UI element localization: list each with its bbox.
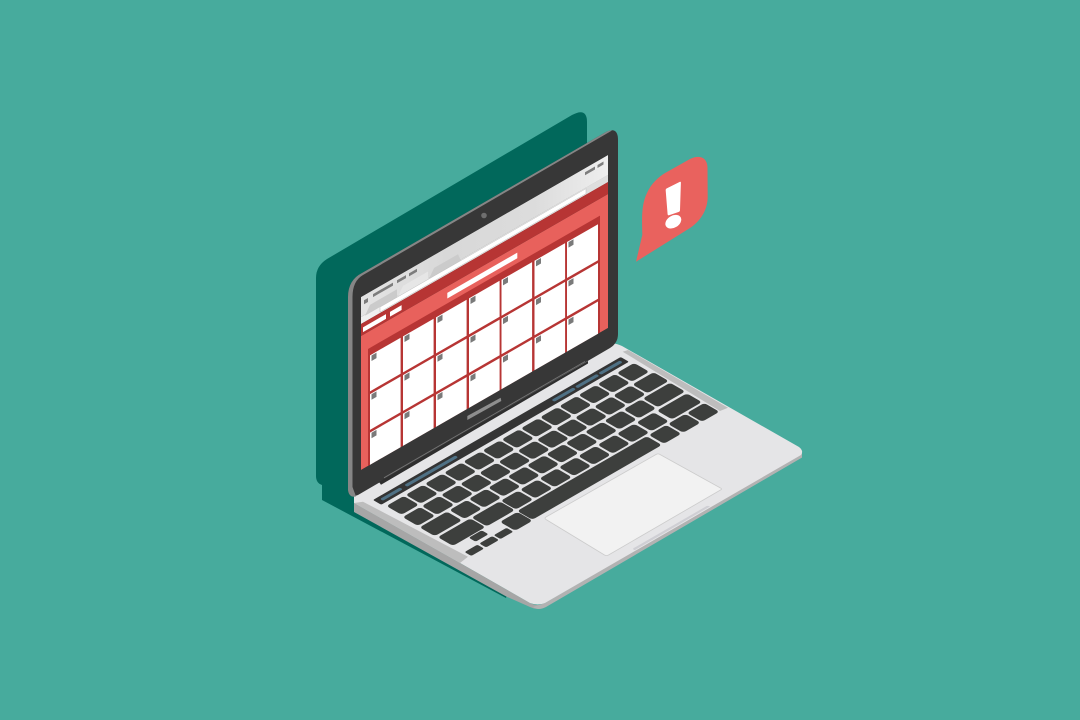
lid rim: [348, 130, 612, 497]
screen red page: [361, 194, 608, 470]
screen with calendar: [361, 155, 608, 474]
laptop lid: [348, 130, 618, 497]
calendar cell markers: [372, 239, 574, 438]
laptop base: [354, 343, 802, 609]
calendar title bar: [447, 253, 517, 298]
bubble shape: [636, 157, 708, 262]
base side edge: [354, 455, 802, 609]
browser tab 2: [398, 271, 428, 297]
right hinge strip: [623, 350, 728, 411]
calendar cells: [370, 224, 598, 469]
left hinge strip: [354, 502, 468, 563]
browser tab 1: [365, 289, 397, 316]
key row 2: [404, 373, 667, 525]
touch bar: [373, 357, 629, 505]
exclamation mark: [663, 182, 684, 231]
front notch: [633, 506, 710, 550]
logo plate: [467, 398, 501, 420]
header button left: [363, 314, 386, 332]
red header band: [361, 182, 608, 336]
key row 1: [388, 364, 648, 514]
browser toolbar: [361, 155, 608, 324]
arrow keys: [455, 522, 513, 556]
key row 4: [439, 394, 701, 545]
deck surface: [354, 343, 802, 604]
laptop shadow: [316, 112, 587, 598]
front edge rim: [533, 453, 802, 609]
key row 3: [421, 384, 684, 535]
header button small: [390, 305, 402, 317]
key row 5 with space bar: [500, 404, 719, 530]
keyboard: [373, 356, 721, 556]
window controls: [364, 162, 604, 304]
browser tab 3: [429, 252, 461, 279]
hinge slit: [379, 361, 588, 485]
illustration: laptop with calendar and alert: [316, 112, 802, 609]
webcam: [481, 213, 487, 218]
address bar: [380, 189, 586, 312]
trackpad: [545, 454, 722, 556]
hinge highlight: [384, 362, 585, 478]
calendar grid frame: [368, 216, 600, 466]
lid bezel: [348, 130, 618, 496]
alert speech bubble: [636, 157, 708, 262]
